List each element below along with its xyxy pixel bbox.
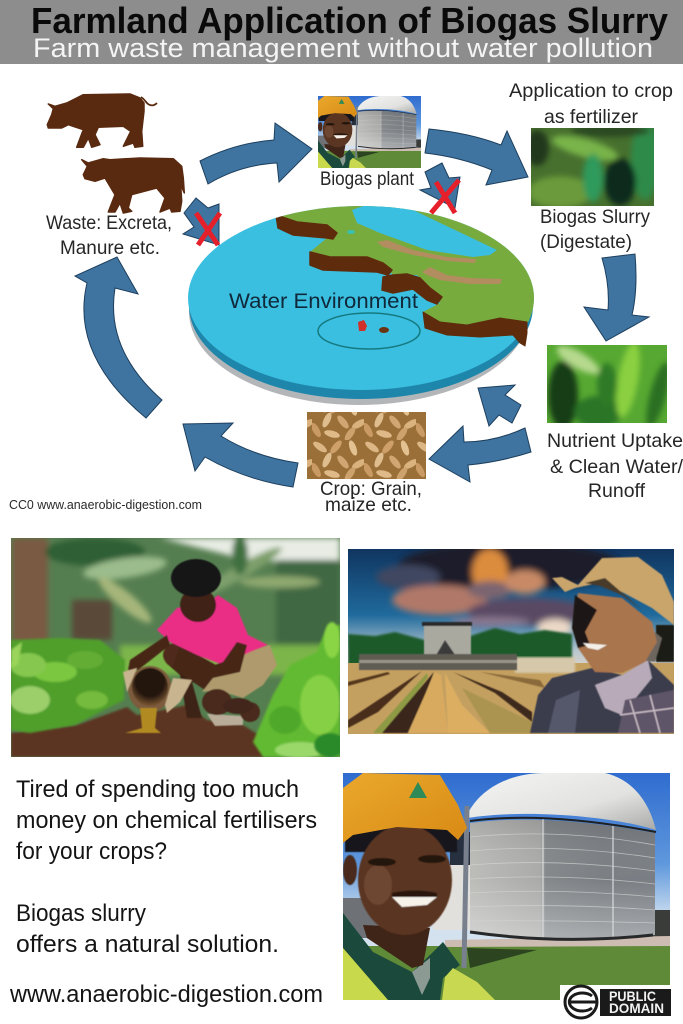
gloves and bucket bbox=[128, 666, 172, 712]
photo: woman pouring slurry bbox=[10, 535, 346, 758]
dome bbox=[467, 773, 656, 830]
label: waste bbox=[46, 212, 172, 259]
credit: CC0 www.anaerobic-digestion.com bbox=[9, 498, 202, 512]
label: water environment: Water Environment bbox=[229, 290, 418, 313]
neck bbox=[363, 925, 430, 968]
text block: question and solution: for your crops? bbox=[16, 838, 167, 865]
text block: question and solution bbox=[16, 776, 317, 958]
shirt bbox=[157, 595, 268, 665]
field bbox=[348, 663, 674, 734]
sandal bbox=[207, 714, 243, 726]
farmer bbox=[530, 557, 674, 733]
label: application bbox=[509, 80, 673, 128]
building bbox=[433, 865, 471, 930]
badge: public domain: PUBLIC bbox=[609, 989, 656, 1004]
label: nutrient uptake: Runoff bbox=[588, 480, 646, 502]
woman figure bbox=[123, 559, 277, 733]
label: crop bbox=[320, 478, 422, 516]
arms bbox=[128, 635, 170, 670]
arrow: uptake to crop bbox=[429, 426, 531, 482]
head bbox=[180, 588, 216, 622]
arrow: runoff to water bbox=[478, 385, 521, 426]
image: nutrient uptake leaves bbox=[547, 345, 667, 423]
blocked arrow: plant to water bbox=[420, 163, 460, 213]
title banner bbox=[0, 0, 683, 64]
far leg bbox=[165, 662, 202, 718]
pole bbox=[464, 806, 467, 968]
soil bbox=[11, 705, 270, 757]
label: biogas plant: Biogas plant bbox=[320, 168, 415, 190]
label: biogas slurry bbox=[540, 206, 650, 253]
arrow: back to waste bbox=[75, 257, 162, 418]
water environment disc bbox=[188, 206, 534, 405]
label: application: as fertilizer bbox=[544, 106, 638, 128]
hard hat bbox=[343, 773, 467, 843]
arrow: digestate to uptake bbox=[584, 254, 649, 341]
badge: public domain bbox=[560, 985, 672, 1020]
label: application: Application to crop bbox=[509, 80, 673, 102]
label: crop: Crop: Grain, bbox=[320, 478, 422, 500]
crops left bbox=[10, 638, 125, 733]
panel: biogas slurry cycle diagram bbox=[9, 80, 683, 516]
icon: cow top bbox=[47, 94, 157, 147]
pond dot bbox=[347, 230, 355, 234]
terraces bbox=[377, 240, 476, 263]
label: biogas slurry: Biogas Slurry bbox=[540, 206, 650, 228]
crops right bbox=[253, 622, 346, 758]
text block: question and solution: money on chemical fertilisers bbox=[16, 807, 317, 834]
near knee bbox=[202, 689, 232, 715]
website url: www.anaerobic-digestion.com bbox=[9, 981, 323, 1008]
tree line bbox=[348, 628, 572, 665]
blocked arrow: waste to water bbox=[183, 198, 220, 245]
hi-vis vest bbox=[343, 948, 388, 1000]
title: Farmland Application of Biogas Slurry bbox=[31, 0, 668, 41]
hat logo bbox=[409, 782, 427, 798]
photo: farmer with machine in field bbox=[348, 542, 674, 734]
text block: question and solution: offers a natural solution. bbox=[16, 931, 279, 958]
text block: question and solution: Biogas slurry bbox=[16, 900, 146, 927]
label: nutrient uptake: & Clean Water/ bbox=[550, 456, 683, 478]
label: waste: Waste: Excreta, bbox=[46, 212, 172, 234]
photo: biogas plant with worker bbox=[343, 773, 670, 1001]
label: biogas slurry: (Digestate) bbox=[540, 231, 632, 253]
worker jacket bbox=[343, 913, 460, 1000]
label: waste: Manure etc. bbox=[60, 237, 160, 259]
image: biogas plant thumbnail bbox=[318, 96, 421, 168]
soil bank: shore bbox=[423, 312, 527, 346]
face bbox=[343, 825, 457, 935]
shorts bbox=[202, 645, 277, 698]
soil banks bbox=[276, 215, 337, 239]
image: grain bbox=[307, 412, 426, 479]
lawn bbox=[343, 946, 670, 1001]
tank bbox=[470, 820, 655, 939]
arrow: waste to biogas plant bbox=[200, 123, 312, 184]
pollutant marks bbox=[358, 320, 389, 333]
label: nutrient uptake bbox=[547, 430, 683, 502]
label: nutrient uptake: Nutrient Uptake bbox=[547, 430, 683, 452]
pollution oval bbox=[318, 313, 420, 349]
arrow: crop to livestock bbox=[183, 423, 298, 487]
land area bbox=[281, 206, 534, 324]
machine bbox=[359, 622, 517, 670]
subtitle: Farm waste management without water pollution bbox=[33, 33, 653, 63]
icon: cow bottom bbox=[82, 158, 184, 213]
label: crop: maize etc. bbox=[325, 494, 412, 516]
arrow: biogas plant to application bbox=[425, 129, 528, 185]
text block: question and solution: Tired of spending too much bbox=[16, 776, 299, 803]
lake bbox=[352, 206, 497, 257]
poured slurry bbox=[125, 708, 161, 733]
badge: public domain: DOMAIN bbox=[609, 1001, 664, 1016]
image: application leaves bbox=[531, 128, 654, 206]
